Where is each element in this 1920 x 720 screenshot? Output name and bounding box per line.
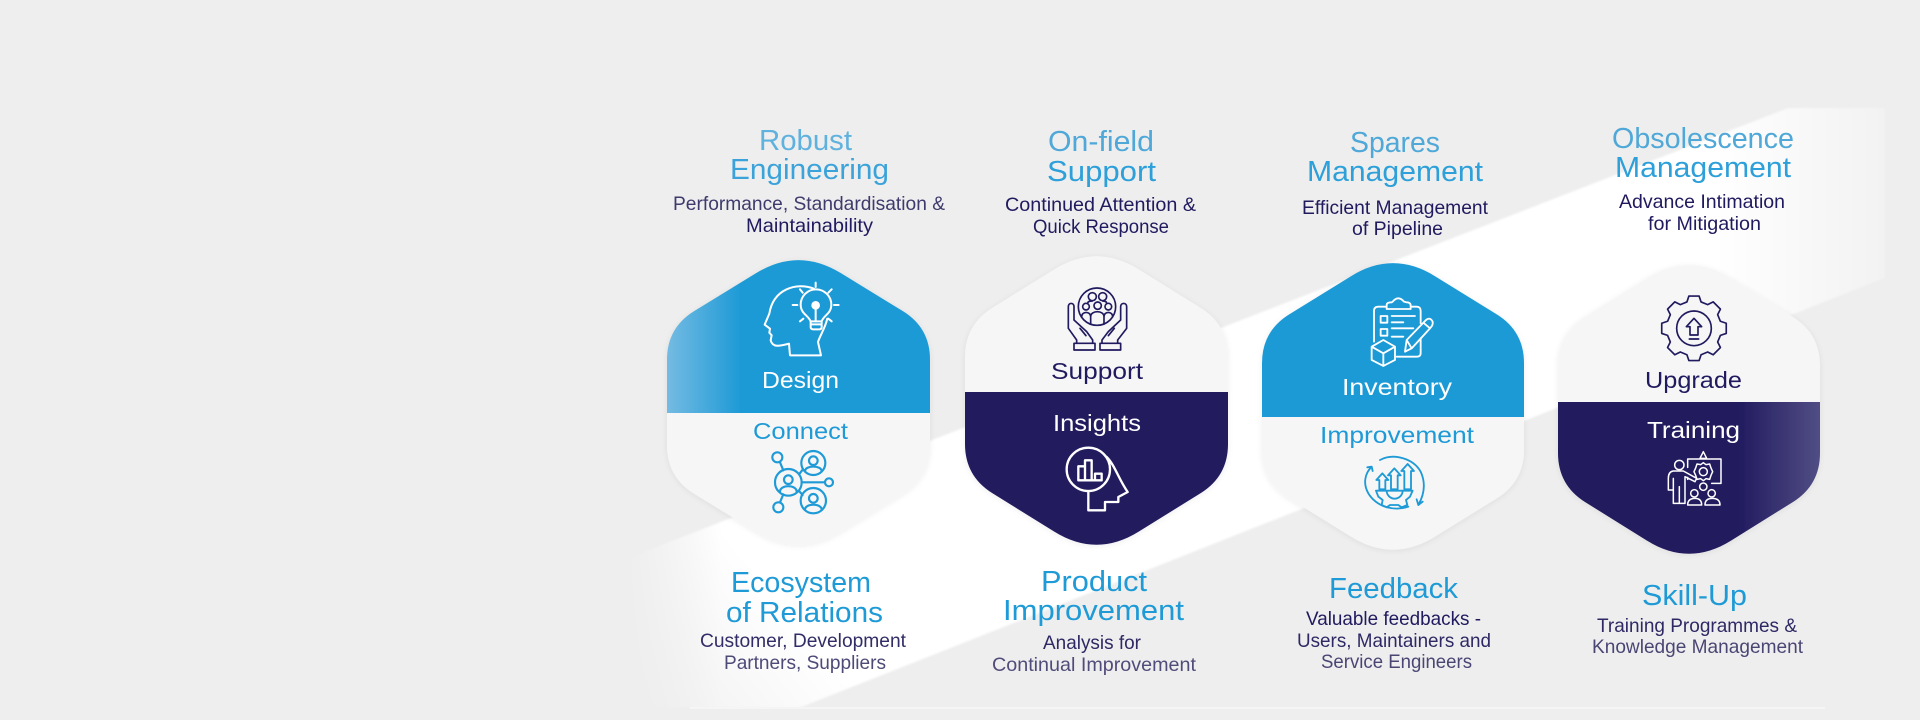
hexagon bottom half [1262,417,1524,550]
description: Customer [700,630,907,674]
heading: Robust Engineering: Engineering [730,154,889,186]
description: Efficient Management: of Pipeline [1352,218,1443,240]
hexagon top half [965,256,1228,392]
heading: Obsolescence Management: Obsolescence [1612,123,1794,155]
heading: Spares Management: Spares [1350,127,1440,159]
column: support and insights [965,126,1228,676]
heading: On-field Support: Support [1047,156,1156,188]
heading: Obsolescence Management: Management [1615,152,1791,184]
description: Valuable feedbacks [1297,608,1491,673]
heading: Robust Engineering [730,125,889,186]
description: Continued Attention: Continued Attention & [1005,194,1196,216]
label: Inventory: Inventory [1342,374,1452,400]
column: inventory and improvement [1262,127,1524,673]
icon: gear with rising arrows [1365,457,1424,509]
description: Training Programmes [1592,615,1804,658]
description: Customer: Customer, Development [700,630,907,652]
label: Insights: Insights [1053,410,1141,436]
hexagon: design / connect [667,260,930,545]
description: Analysis: Continual Improvement [992,654,1197,676]
icon: connected people network [772,451,833,513]
heading: Ecosystem of Relations: of Relations [726,597,883,629]
column: design and connect [667,125,945,674]
label: Support: Support [1051,358,1144,384]
description: Continued Attention [1005,194,1196,238]
heading: Product Improvement [1003,566,1184,627]
heading: Spares Management: Management [1307,156,1483,188]
heading: Feedback: Feedback [1329,573,1459,605]
hexagon: upgrade / training [1558,265,1820,554]
heading: Product Improvement: Improvement [1003,595,1184,627]
icon: head with bar chart [1067,448,1128,510]
description: Advance Intimation: for Mitigation [1648,213,1761,235]
description: Performance: Performance, Standardisation & [673,193,945,215]
description: Training Programmes: Knowledge Management [1592,636,1804,658]
hexagon top half [1558,265,1820,402]
hexagon top half [667,260,930,413]
column: upgrade and training [1558,123,1820,658]
description: Efficient Management: Efficient Management [1302,197,1489,219]
heading: Robust Engineering: Robust [759,125,852,157]
description: Training Programmes: Training Programmes & [1597,615,1797,637]
hexagon bottom half [1558,402,1820,554]
heading: Spares Management [1307,127,1483,188]
hexagon top half [1262,263,1524,417]
icon: gear with up arrow [1662,296,1726,361]
label: Improvement: Improvement [1320,422,1475,448]
label: Upgrade: Upgrade [1645,367,1742,393]
heading: Obsolescence Management [1612,123,1794,184]
description: Analysis [992,632,1197,676]
heading: Ecosystem of Relations [726,567,883,629]
description: Continued Attention: Quick Response [1033,216,1169,238]
label: Design: Design [762,367,839,393]
hexagon bottom half [965,392,1228,545]
icon: clipboard, pencil and box [1372,298,1433,366]
icon: head with light bulb [765,283,839,355]
label: Connect: Connect [753,418,849,444]
diagonal white band [620,108,1885,708]
hexagon: support / insights [965,256,1228,545]
description: Performance [673,193,945,237]
bottom rule [690,707,1825,709]
hexagon: inventory / improvement [1262,263,1524,550]
description: Valuable feedbacks: Users, Maintainers and [1297,630,1491,652]
description: Valuable feedbacks: Service Engineers [1321,651,1472,673]
heading: Ecosystem of Relations: Ecosystem [731,567,871,599]
description: Advance Intimation [1619,191,1785,235]
heading: On-field Support: On-field [1048,126,1154,158]
description: Performance: Maintainability [746,215,873,237]
label: Training: Training [1647,417,1740,443]
icon: trainer with audience [1668,452,1721,505]
hexagon bottom half [667,413,930,545]
heading: On-field Support [1047,126,1156,188]
description: Analysis: Analysis for [1043,632,1141,654]
heading: Product Improvement: Product [1041,566,1147,598]
description: Valuable feedbacks: Valuable feedbacks - [1306,608,1481,630]
icon: hands holding people [1068,288,1127,350]
heading: Skill-Up: Skill-Up [1642,580,1747,612]
description: Efficient Management [1302,197,1489,240]
description: Advance Intimation: Advance Intimation [1619,191,1785,213]
description: Customer: Partners, Suppliers [724,652,886,674]
